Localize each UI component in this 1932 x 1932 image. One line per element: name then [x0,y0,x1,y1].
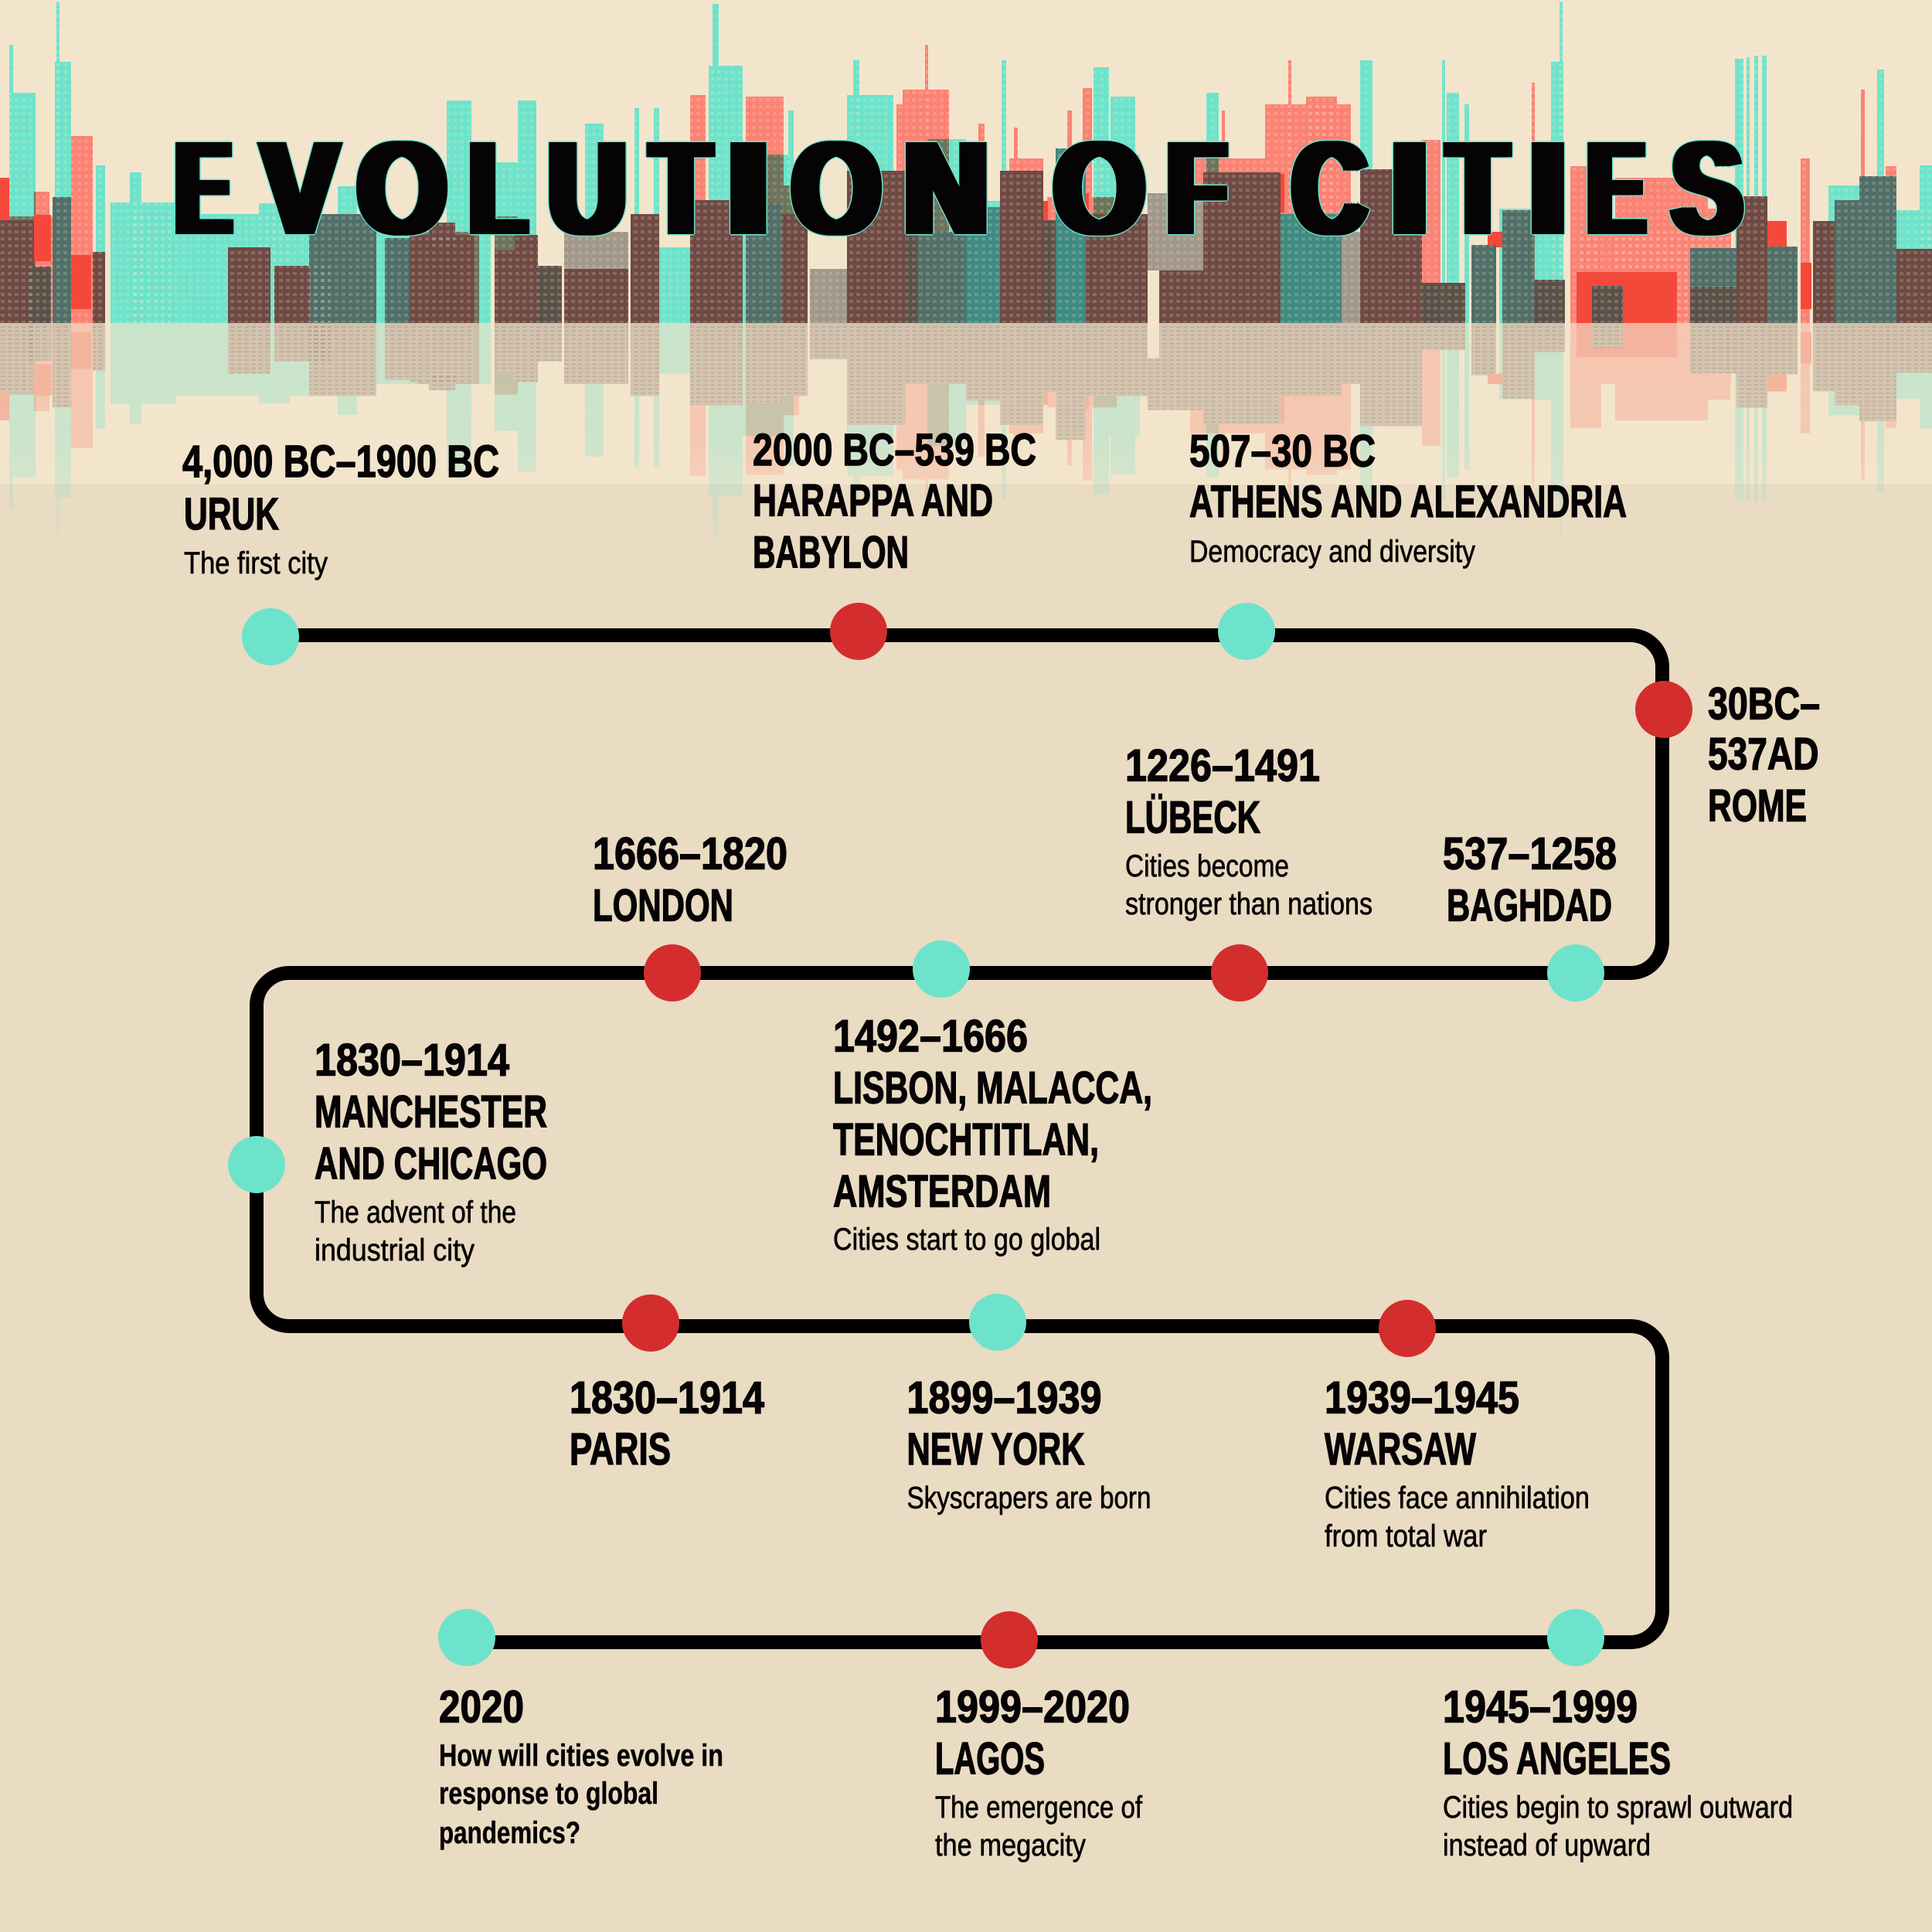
label: Manchester and Chicago: The advent of the [315,1196,516,1230]
label: Los Angeles: 1945–1999 [1443,1682,1638,1733]
title: C [1293,113,1366,263]
label: Baghdad [1443,828,1617,930]
label: Lübeck: 1226–1491 [1125,740,1320,791]
label: Rome: ROME [1708,781,1807,832]
label: Lübeck [1125,740,1372,921]
label: Lisbon, Malacca, Tenochtitlan, Amsterdam [833,1011,1152,1257]
label: Manchester and Chicago: industrial city [315,1233,474,1267]
label: Uruk: The first city [184,546,328,580]
label: Manchester and Chicago: 1830–1914 [315,1036,509,1085]
label: Lübeck: LÜBECK [1125,793,1260,842]
skyline with reflection [0,2,1932,538]
label: Uruk [182,437,499,580]
timeline nodes [228,603,1692,1668]
label: Lagos: 1999–2020 [935,1682,1130,1733]
label: New York: NEW YORK [907,1424,1085,1475]
label: Paris [570,1372,764,1475]
label: Los Angeles: instead of upward [1443,1828,1651,1862]
title: T [1448,113,1507,263]
label: 2020: pandemics? [439,1816,580,1850]
title: O [358,113,446,263]
label: Paris: 1830–1914 [570,1372,764,1423]
label: Harappa and Babylon: BABYLON [753,527,909,578]
label: Manchester and Chicago [315,1036,547,1267]
timeline path [257,635,1662,1642]
label: 2020: 2020 [439,1682,524,1733]
label: Warsaw: from total war [1325,1519,1487,1553]
label: Lübeck: Cities become [1125,849,1289,883]
label: Warsaw: WARSAW [1325,1424,1476,1475]
title: U [549,113,626,263]
skyline buildings [0,2,1932,323]
label: London [593,828,787,930]
label: Warsaw: 1939–1945 [1325,1372,1519,1423]
title: I [1390,113,1429,263]
title: N [904,113,988,263]
label: 2020: How will cities evolve in [439,1739,723,1773]
label: Harappa and Babylon [753,425,1036,578]
title: E [1588,113,1645,263]
label: Harappa and Babylon: HARAPPA AND [753,476,993,526]
skyline reflection [0,323,1932,539]
label: Lagos: The emergence of [935,1791,1143,1825]
label: Paris: PARIS [570,1424,671,1475]
label: Athens and Alexandria [1189,427,1627,569]
label: Uruk: 4,000 BC–1900 BC [182,437,499,487]
label: Rome: 537AD [1708,730,1819,779]
label: Manchester and Chicago: AND CHICAGO [315,1139,547,1189]
background: upper lighter sky band [0,0,1932,485]
title: V [262,113,338,263]
label: New York: 1899–1939 [907,1372,1102,1423]
label: Lagos: LAGOS [935,1734,1045,1784]
label: Rome [1708,679,1820,832]
label: Los Angeles [1443,1682,1793,1862]
label: Manchester and Chicago: MANCHESTER [315,1087,547,1138]
label: London: 1666–1820 [593,828,787,879]
label: 2020: response to global [439,1777,658,1811]
label: Lisbon, Malacca, Tenochtitlan, Amsterdam: 1492–1666 [833,1011,1028,1062]
label: Harappa and Babylon: 2000 BC–539 BC [753,425,1036,475]
label: Lisbon, Malacca, Tenochtitlan, Amsterdam: LISBON, MALACCA, [833,1063,1152,1113]
label: Los Angeles: Cities begin to sprawl outward [1443,1791,1793,1825]
label: Los Angeles: LOS ANGELES [1443,1734,1671,1784]
label: Lisbon, Malacca, Tenochtitlan, Amsterdam: TENOCHTITLAN, [833,1114,1099,1165]
label: New York [907,1372,1151,1515]
label: Lisbon, Malacca, Tenochtitlan, Amsterdam: AMSTERDAM [833,1167,1051,1216]
label: Warsaw: Cities face annihilation [1325,1481,1590,1515]
label: New York: Skyscrapers are born [907,1481,1151,1515]
label: Athens and Alexandria: ATHENS AND ALEXANDRIA [1189,477,1627,527]
label: Athens and Alexandria: Democracy and diversity [1189,535,1475,569]
title: F [1168,113,1226,263]
title: E [176,113,230,263]
label: London: LONDON [593,881,733,930]
title: O [792,113,880,263]
label: Rome: 30BC– [1708,679,1820,730]
title: T [651,113,710,263]
label: Warsaw [1325,1372,1590,1553]
title: L [470,113,526,263]
label: Lagos [935,1682,1143,1862]
label: Baghdad: BAGHDAD [1447,881,1612,930]
label: Uruk: URUK [184,489,279,539]
label: Lübeck: stronger than nations [1125,887,1372,921]
title: S [1672,113,1742,263]
label: Baghdad: 537–1258 [1443,828,1617,879]
label: Lisbon, Malacca, Tenochtitlan, Amsterdam: Cities start to go global [833,1223,1100,1257]
title: I [726,113,771,263]
title: I [1529,113,1567,263]
label: 2020 [439,1682,723,1850]
label: Lagos: the megacity [935,1828,1086,1862]
label: Athens and Alexandria: 507–30 BC [1189,427,1376,476]
title: O [1054,113,1145,263]
title [175,113,1745,263]
